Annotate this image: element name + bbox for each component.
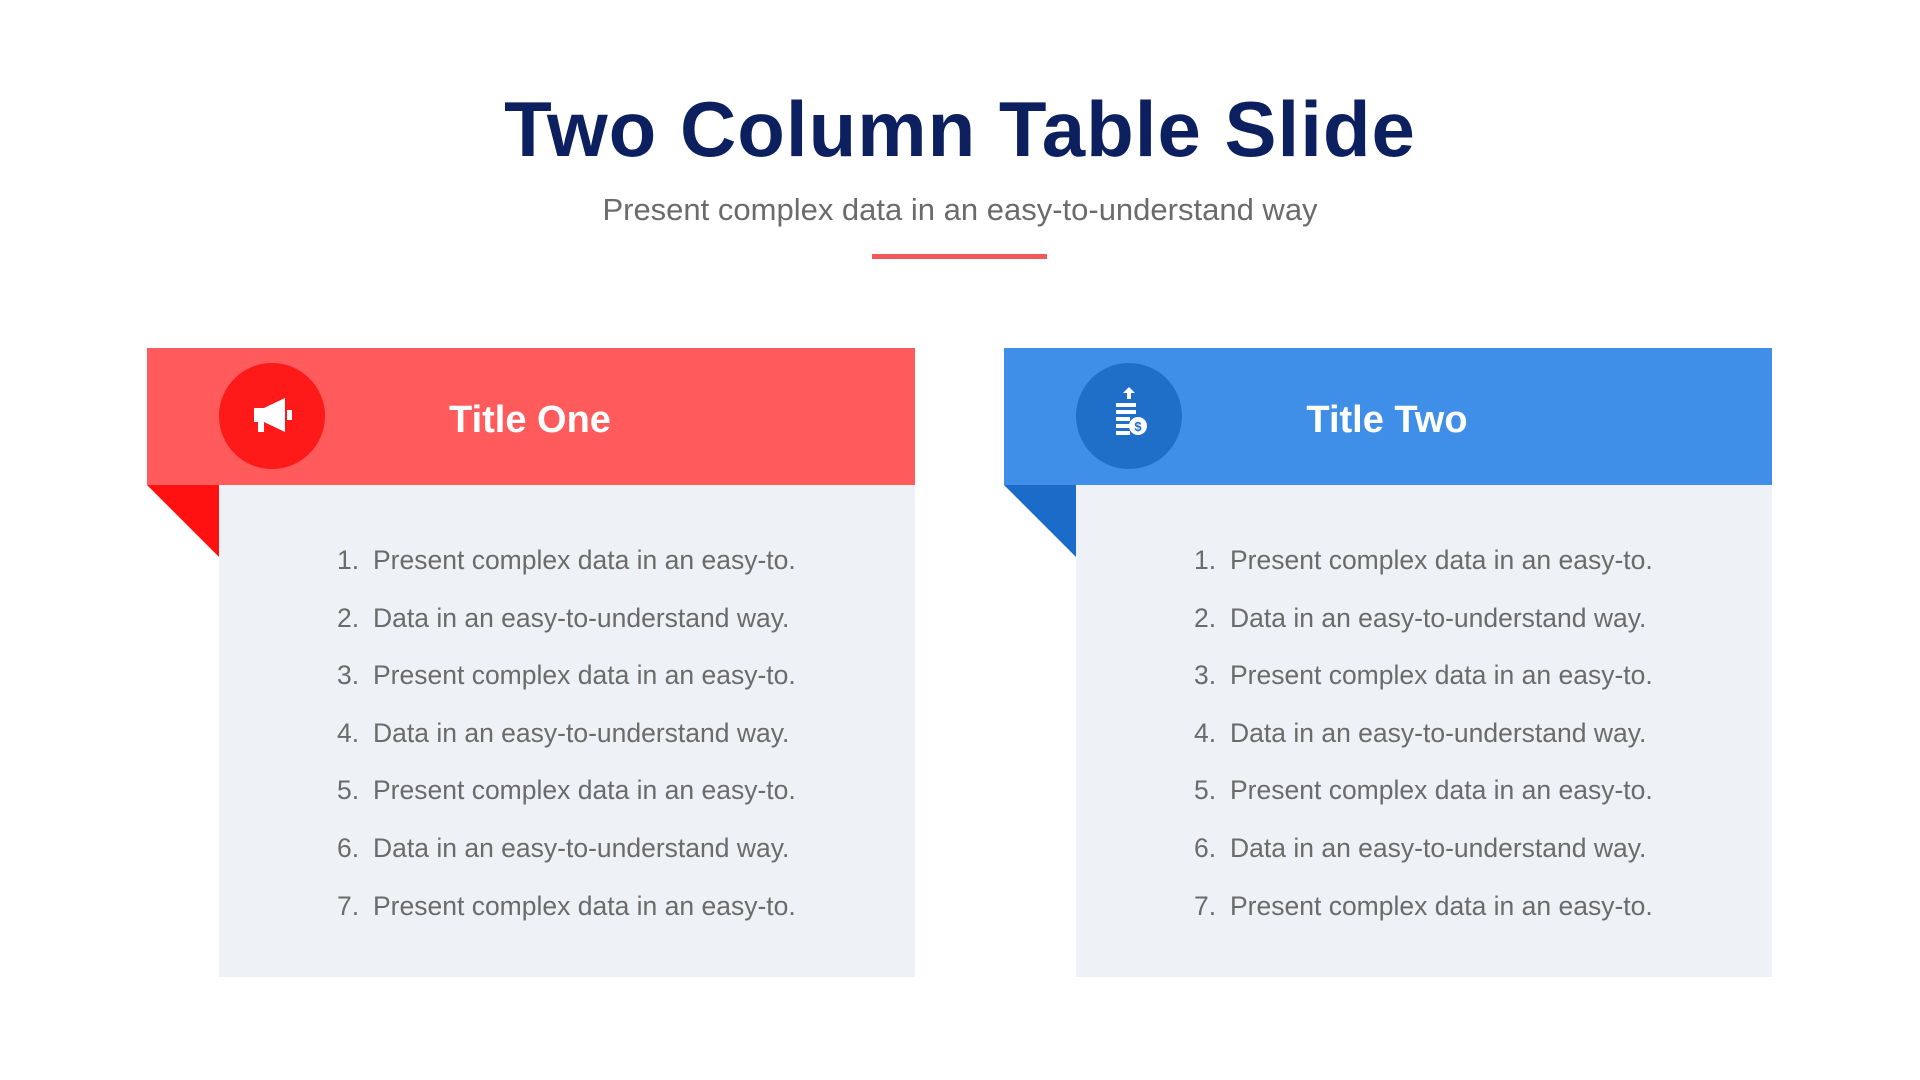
left fold triangle — [147, 485, 219, 557]
left list: 2. — [337, 603, 359, 633]
right list: 6. — [1194, 833, 1216, 863]
subtitle: Present complex data in an easy-to-understand way — [602, 192, 1318, 227]
right list — [1194, 545, 1653, 921]
right list: Present complex data in an easy-to. — [1230, 660, 1653, 690]
left body — [219, 485, 915, 977]
left heading: Title One — [449, 399, 611, 441]
left list: Data in an easy-to-understand way. — [373, 603, 789, 633]
left list: Present complex data in an easy-to. — [373, 545, 796, 575]
left list: Data in an easy-to-understand way. — [373, 718, 789, 748]
right list: Data in an easy-to-understand way. — [1230, 718, 1646, 748]
left list — [337, 545, 796, 921]
icon: megaphone — [219, 363, 325, 469]
icon: coins: $ — [1134, 419, 1142, 434]
left list: 3. — [337, 660, 359, 690]
right list: Present complex data in an easy-to. — [1230, 545, 1653, 575]
right fold triangle — [1004, 485, 1076, 557]
right list: Present complex data in an easy-to. — [1230, 775, 1653, 805]
left list: 1. — [337, 545, 359, 575]
right header — [1004, 348, 1772, 485]
right list: Data in an easy-to-understand way. — [1230, 603, 1646, 633]
right list: 4. — [1194, 718, 1216, 748]
right list: 1. — [1194, 545, 1216, 575]
left list: Present complex data in an easy-to. — [373, 775, 796, 805]
left list: 6. — [337, 833, 359, 863]
left list: Present complex data in an easy-to. — [373, 660, 796, 690]
right list: 3. — [1194, 660, 1216, 690]
right list: 5. — [1194, 775, 1216, 805]
left list: 5. — [337, 775, 359, 805]
left list: Present complex data in an easy-to. — [373, 891, 796, 921]
right list: 7. — [1194, 891, 1216, 921]
left list: 7. — [337, 891, 359, 921]
right heading: Title Two — [1306, 399, 1468, 441]
title: Two Column Table Slide — [504, 85, 1416, 173]
right list: Data in an easy-to-understand way. — [1230, 833, 1646, 863]
left list: 4. — [337, 718, 359, 748]
right list: Present complex data in an easy-to. — [1230, 891, 1653, 921]
icon: coins — [1076, 363, 1182, 469]
accent line — [872, 254, 1047, 259]
right list: 2. — [1194, 603, 1216, 633]
left list: Data in an easy-to-understand way. — [373, 833, 789, 863]
left header — [147, 348, 915, 485]
right body — [1076, 485, 1772, 977]
